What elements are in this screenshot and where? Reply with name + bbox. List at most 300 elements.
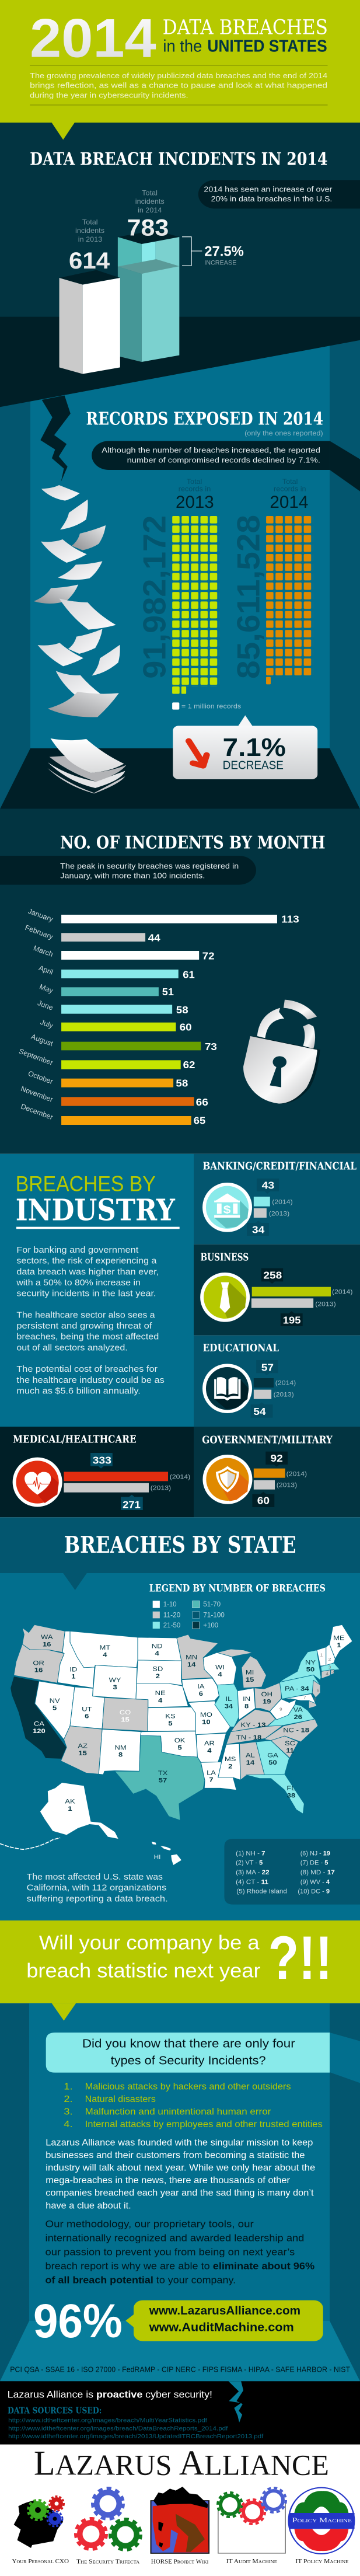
mission paragraph: businesses and their customers from becoming a statistic the	[46, 2150, 305, 2160]
small states box: (7) DE - 5	[300, 1860, 328, 1866]
bar chart: months: 62	[183, 1059, 195, 1071]
industry text	[16, 1245, 165, 1396]
logo captions: IT Policy Machine	[295, 2558, 348, 2565]
incident types list: Internal attacks by employees and other trusted entities	[85, 2119, 323, 2129]
lazarus alliance wordmark: LAZARUS ALLIANCE	[34, 2444, 329, 2483]
label 2013: 2013	[176, 492, 214, 511]
subtitle: (only the ones reported)	[244, 429, 323, 437]
state labels: SD	[152, 1665, 163, 1672]
callout pill: The peak in security breaches was registered in	[60, 862, 239, 870]
bar chart: months: 58	[176, 1078, 188, 1089]
industry text: with a 50% to 80% increase in	[16, 1278, 141, 1288]
incident types list: Natural disasters	[85, 2094, 156, 2104]
methodology paragraph: our passion to prevent you from being on next year’s	[46, 2246, 295, 2257]
label: total 2013: incidents	[75, 226, 104, 235]
question banner: breach statistic next year	[26, 1960, 261, 1982]
state labels: ID	[69, 1665, 78, 1673]
map legend: 51-70	[203, 1600, 221, 1608]
panel: educational: (2013)	[274, 1391, 294, 1398]
state labels: 4	[218, 1671, 222, 1678]
label: total 2014	[135, 189, 165, 214]
industry text: The potential cost of breaches for	[16, 1364, 158, 1374]
small states box: (1) NH - 7	[236, 1850, 265, 1857]
value 783: 783	[127, 215, 169, 240]
panel: government: (2014)	[286, 1470, 307, 1477]
state labels: 4	[207, 1747, 212, 1754]
vertical number 2014: 85,611,528	[230, 515, 267, 679]
vertical number 2013: 91,982,172	[136, 515, 172, 679]
logo gears: personal cxo	[28, 2496, 64, 2526]
state labels: WI	[215, 1664, 225, 1671]
california note: California, with 112 organizations	[27, 1883, 166, 1892]
increase stat: INCREASE	[204, 259, 236, 266]
methodology paragraph: internationally recognized and awarded leadership and	[46, 2232, 304, 2243]
value 614: 614	[69, 248, 110, 274]
hawaii	[152, 1842, 181, 1865]
panel: educational: EDUCATIONAL	[202, 1342, 279, 1354]
state labels: TX	[158, 1769, 167, 1777]
label 2013	[176, 477, 214, 511]
logo: policy machine: Policy Machine	[292, 2516, 352, 2524]
state labels: 6	[85, 1713, 89, 1720]
state labels: AR	[204, 1740, 215, 1747]
state labels: SC	[285, 1740, 295, 1747]
label: total 2014: in 2014	[138, 206, 162, 214]
did you know box: types of Security Incidents?	[111, 2054, 266, 2067]
closing copy	[33, 2082, 323, 2347]
state labels: 6	[199, 1690, 203, 1697]
month labels: November	[20, 1085, 54, 1104]
state labels: 19	[263, 1698, 271, 1705]
map section	[11, 1583, 352, 1839]
panel: medical: (2014)	[170, 1473, 190, 1480]
state labels: 26	[294, 1713, 302, 1721]
label: total 2013: in 2013	[78, 235, 102, 243]
state labels: 15	[78, 1749, 87, 1757]
state labels: OK	[174, 1737, 185, 1744]
small states box: (4) CT - 11	[236, 1878, 269, 1885]
month labels: December	[20, 1102, 54, 1121]
footer	[8, 2365, 355, 2565]
state labels: 3	[113, 1683, 117, 1691]
state labels: MN	[186, 1654, 197, 1661]
incident types list: Malicious attacks by hackers and other outsiders	[85, 2082, 291, 2092]
state labels: PA - 34	[285, 1685, 309, 1692]
state labels: 2	[228, 1763, 233, 1770]
falling papers	[34, 485, 120, 717]
state labels: 34	[225, 1702, 233, 1710]
state labels: 9	[279, 1707, 282, 1711]
state labels: 50	[306, 1666, 315, 1673]
label 2013: records in	[179, 485, 211, 493]
header block	[30, 8, 328, 140]
bar chart: months: 113	[281, 914, 299, 925]
state labels: 11	[286, 1747, 294, 1754]
state labels: TN - 18	[236, 1734, 262, 1741]
month labels: September	[18, 1047, 54, 1067]
hawaii: HI	[154, 1854, 160, 1861]
data sources links: http://www.idtheftcenter.org/images/breach/DataBreachReports_2014.pdf	[8, 2425, 228, 2432]
websites bubble: www.AuditMachine.com	[149, 2320, 294, 2334]
state labels: NY	[305, 1658, 316, 1666]
panel: educational: 54	[253, 1406, 266, 1418]
title: united states: UNITED STATES	[207, 37, 327, 55]
bar 2013	[60, 248, 120, 374]
incidents by month section	[0, 832, 326, 1127]
state labels: 4	[155, 1650, 159, 1657]
title: 2014: 2014	[30, 8, 156, 69]
state labels: 14	[187, 1661, 196, 1668]
month labels: July	[39, 1018, 54, 1030]
state labels: 16	[43, 1640, 51, 1648]
state labels: 1	[71, 1673, 76, 1680]
methodology paragraph: breach report is why we are able to eliminate about 96%	[46, 2260, 314, 2271]
icon: shield	[216, 1466, 249, 1501]
label 2014: Total	[282, 477, 298, 486]
panel: medical: MEDICAL/HEALTHCARE	[13, 1433, 137, 1445]
callout pill	[198, 180, 360, 208]
state labels: ND	[152, 1642, 163, 1650]
month labels	[18, 907, 54, 1121]
title: in the: in the	[163, 37, 202, 55]
state labels: KY - 13	[241, 1721, 266, 1728]
small states box: (8) MD - 17	[300, 1869, 335, 1876]
logo: horse project	[151, 2487, 209, 2553]
incident types list: 3.	[64, 2107, 72, 2117]
label 2014	[270, 477, 308, 511]
logo gears: audit machine	[218, 2488, 286, 2524]
state labels: 2	[328, 1657, 331, 1662]
map legend: 11-20	[163, 1611, 180, 1619]
state labels: GA	[267, 1752, 278, 1759]
state labels: 4	[326, 1672, 329, 1676]
websites bubble	[125, 2300, 323, 2341]
label: total 2014: incidents	[135, 197, 165, 205]
state labels: WY	[109, 1676, 121, 1683]
label: total 2013	[75, 218, 104, 243]
intro text: brings reflection, as well as a chance to pause and look at what happened	[30, 82, 327, 90]
panel: medical: 271	[123, 1500, 141, 1511]
mission paragraph: Lazarus Alliance was founded with the singular mission to keep	[46, 2138, 313, 2148]
state labels: MS	[225, 1755, 236, 1763]
state labels: 4	[158, 1696, 163, 1704]
did you know box: Did you know that there are only four	[82, 2037, 295, 2050]
state labels: 14	[246, 1759, 254, 1766]
state labels: IL	[226, 1695, 232, 1703]
panel: banking: (2013)	[269, 1210, 289, 1217]
small states box: (5) Rhode Island	[236, 1888, 287, 1895]
data sources heading: DATA SOURCES USED:	[8, 2406, 102, 2415]
panel: banking: (2014)	[272, 1198, 293, 1205]
mission paragraph: mega-breaches in the news, there are thousands of other	[46, 2175, 290, 2185]
state labels: 57	[159, 1776, 167, 1784]
records exposed section	[40, 395, 360, 511]
label 2013: Total	[187, 477, 202, 486]
callout pill: 20% in data breaches in the U.S.	[211, 194, 332, 203]
state labels: LA	[207, 1769, 216, 1776]
industry text: security incidents in the last year.	[16, 1289, 156, 1298]
panel: medical: (2013)	[151, 1484, 171, 1491]
state labels: NC - 18	[283, 1727, 309, 1734]
panel: medical	[13, 1433, 190, 1511]
header arrow	[52, 123, 75, 140]
map legend: 71-100	[203, 1611, 225, 1619]
small states box: (10) DC - 9	[298, 1888, 330, 1895]
state labels: 1	[337, 1641, 341, 1649]
logo captions	[12, 2558, 348, 2565]
state labels: 6	[317, 1688, 319, 1693]
state labels: MT	[99, 1644, 111, 1651]
state labels: VA	[293, 1706, 303, 1713]
bar chart: months: 60	[180, 1022, 192, 1033]
state labels: 3	[328, 1665, 331, 1669]
state labels: 5	[53, 1704, 57, 1711]
small states box: (9) WV - 4	[300, 1878, 330, 1885]
state labels: UT	[82, 1705, 92, 1713]
label 2014: records in	[274, 485, 306, 493]
methodology paragraph	[46, 2218, 314, 2285]
state labels: 15	[121, 1716, 130, 1723]
icon: bank: $	[223, 1204, 231, 1216]
icon: book	[214, 1377, 249, 1409]
panel: educational: (2014)	[275, 1379, 296, 1386]
panel: banking	[202, 1160, 356, 1236]
state labels: IN	[243, 1695, 250, 1703]
incident types list: 1.	[64, 2082, 72, 2092]
logo captions: HORSE Project Wiki	[151, 2558, 209, 2565]
bar chart: months: 72	[202, 951, 215, 962]
panel: business: (2013)	[315, 1300, 336, 1308]
icon: down arrow	[188, 741, 207, 766]
state labels: 8	[118, 1751, 123, 1758]
state labels: OR	[33, 1659, 44, 1667]
increase stat	[204, 243, 244, 266]
state labels: 1	[68, 1805, 72, 1812]
map legend: 21-50	[163, 1621, 180, 1629]
state labels: AZ	[78, 1742, 88, 1749]
state labels: AK	[65, 1798, 75, 1805]
state labels: 50	[268, 1759, 277, 1766]
callout pill	[0, 856, 256, 885]
increase stat: 27.5%	[204, 243, 244, 259]
intro text: during the year in cybersecurity incidents.	[30, 92, 188, 100]
industry text: out of all sectors analyzed.	[16, 1343, 128, 1353]
panel: educational: 57	[261, 1362, 274, 1374]
state labels: FL	[286, 1784, 296, 1792]
panel: business	[200, 1251, 352, 1326]
incidents section	[30, 148, 360, 374]
us map	[11, 1625, 352, 1820]
logo: personal cxo head	[14, 2500, 63, 2548]
state labels: 5	[178, 1744, 182, 1751]
month labels: February	[24, 923, 54, 941]
mission paragraph	[46, 2138, 315, 2211]
decrease callout: DECREASE	[223, 758, 284, 772]
state labels: OH	[261, 1690, 272, 1698]
bar chart: months: 66	[196, 1097, 208, 1109]
label: total 2013: Total	[82, 218, 98, 226]
small states box: (3) MA - 22	[236, 1869, 270, 1876]
month labels: April	[37, 964, 54, 977]
state labels: 4	[103, 1651, 107, 1658]
websites bubble: www.LazarusAlliance.com	[149, 2304, 300, 2317]
state labels: 38	[287, 1791, 296, 1799]
state labels: 7	[303, 1695, 306, 1700]
logo captions: The Security Trifecta	[76, 2558, 139, 2565]
bar chart: months: 58	[176, 1005, 188, 1016]
state labels	[33, 1633, 345, 1812]
state labels: KS	[165, 1713, 176, 1720]
state labels: 5	[331, 1669, 334, 1674]
panel: business: 258	[263, 1270, 282, 1281]
mission paragraph: industry will talk about next year. While we only hear about the	[46, 2163, 315, 2173]
did you know box	[46, 2033, 330, 2073]
state labels: WA	[41, 1633, 53, 1641]
records grids and callout	[34, 485, 317, 793]
breaches by industry lower	[13, 1342, 333, 1590]
small states box: (6) NJ - 19	[300, 1850, 330, 1857]
methodology paragraph: Our methodology, our proprietary tools, our	[46, 2218, 254, 2229]
intro text: The growing prevalence of widely publicized data breaches and the end of 2014	[30, 72, 327, 81]
alaska	[40, 1783, 118, 1839]
state section arrow	[63, 1573, 87, 1590]
map legend: +100	[203, 1621, 218, 1629]
data sources links: http://www.idtheftcenter.org/images/breach/MultiYearStatistics.pdf	[8, 2417, 208, 2424]
industry text: persistent and growing threat of	[16, 1321, 152, 1331]
small states box: (2) VT - 5	[236, 1860, 263, 1866]
small states box	[224, 1839, 360, 1905]
logo gears: security trifecta	[76, 2488, 141, 2550]
month labels: May	[39, 982, 54, 995]
map footer	[0, 1838, 360, 2083]
panel: business: BUSINESS	[201, 1251, 249, 1263]
month labels: October	[27, 1069, 54, 1086]
state labels: CO	[120, 1709, 131, 1716]
state labels: MI	[246, 1669, 254, 1676]
question banner: ?!!	[268, 1924, 332, 1992]
decrease callout	[173, 715, 317, 779]
map legend: 1-10	[163, 1600, 177, 1608]
icon: broken padlock	[243, 1000, 320, 1104]
month labels: August	[30, 1033, 54, 1048]
california note: The most affected U.S. state was	[27, 1872, 163, 1882]
bar chart: months: 44	[148, 933, 160, 944]
month labels: March	[32, 944, 54, 958]
proactive line: Lazarus Alliance is proactive cyber security!	[8, 2389, 212, 2400]
panel: government	[202, 1434, 333, 1507]
industry text: the healthcare industry could be as	[16, 1375, 165, 1385]
heading: breaches by: BREACHES BY	[16, 1172, 156, 1196]
stat: 96%: 96%	[33, 2294, 123, 2347]
state labels: NV	[50, 1697, 60, 1704]
state labels: 1	[320, 1653, 323, 1657]
state labels: 2	[156, 1672, 160, 1680]
incident types list: 4.	[64, 2119, 72, 2129]
callout pill: Although the number of breaches increased, the reported	[102, 446, 320, 454]
map legend	[153, 1600, 225, 1629]
state labels: MO	[200, 1711, 212, 1719]
industry text: sectors, the risk of experiencing a	[16, 1256, 157, 1266]
logo: policy machine	[289, 2488, 355, 2554]
logo: audit machine frame	[218, 2502, 285, 2553]
mission paragraph: have a clue about it.	[46, 2201, 131, 2211]
question banner	[26, 1924, 332, 1992]
state labels: AL	[246, 1752, 255, 1759]
industry text: breaches, being the most affected	[16, 1332, 159, 1341]
heading: industry: INDUSTRY	[16, 1193, 176, 1228]
state labels: NE	[155, 1689, 166, 1697]
intro text	[30, 72, 327, 100]
panel: business: 195	[283, 1315, 301, 1326]
perspective shadow	[330, 441, 360, 492]
callout pill: 2014 has seen an increase of over	[204, 184, 333, 193]
callout pill	[92, 441, 330, 470]
label 2014: 2014	[270, 492, 308, 511]
bar chart: months: 51	[162, 987, 174, 998]
bracket	[182, 237, 202, 266]
month labels: June	[36, 999, 54, 1012]
state labels: 10	[202, 1719, 211, 1726]
data sources links	[8, 2417, 264, 2440]
data sources links: http://www.idtheftcenter.org/images/breach/2013/UpdatedITRCBreachReport2013.pdf	[8, 2434, 264, 2440]
callout pill: January, with more than 100 incidents.	[60, 872, 205, 880]
methodology paragraph: of all breach potential to your company.	[46, 2274, 236, 2285]
panel: business: (2014)	[332, 1288, 352, 1295]
state labels: ME	[333, 1634, 345, 1641]
logo captions: IT Audit Machine	[226, 2558, 277, 2565]
grid 2013	[172, 516, 219, 694]
incident types list: Malfunction and unintentional human error	[85, 2107, 271, 2117]
alaska islands	[0, 1838, 60, 1849]
perspective strip	[330, 2033, 360, 2083]
bar chart: months: 73	[205, 1041, 217, 1053]
industry text: The healthcare sector also sees a	[16, 1310, 155, 1320]
industry text: much as $5.6 billion annually.	[16, 1386, 141, 1396]
california note: suffering reporting a data breach.	[27, 1894, 168, 1904]
state labels: CA	[34, 1720, 44, 1727]
mission paragraph: companies breached each year and the sad thing is many don’t	[46, 2188, 314, 2198]
breaches by industry upper	[16, 1160, 356, 1396]
industry text: data breach was higher than ever,	[16, 1267, 159, 1277]
state labels: 5	[168, 1720, 173, 1727]
state labels: 8	[314, 1697, 316, 1702]
state labels: 120	[33, 1727, 46, 1735]
icon: tie	[220, 1282, 246, 1318]
state labels: 8	[244, 1702, 249, 1710]
month labels: January	[27, 907, 54, 923]
icon: bank	[214, 1193, 249, 1228]
logo captions: Your Personal CXO	[12, 2558, 69, 2565]
panel: banking: 34	[252, 1225, 265, 1236]
paper stack	[47, 738, 126, 793]
panel: banking: 43	[262, 1180, 274, 1191]
banner arrow	[52, 2003, 76, 2021]
panel: government: 60	[257, 1496, 270, 1507]
panel: government: (2013)	[277, 1481, 297, 1489]
incident types list: 2.	[64, 2094, 72, 2104]
bar chart: months	[61, 914, 299, 1127]
state labels: 16	[34, 1667, 43, 1674]
state labels: NM	[115, 1744, 127, 1751]
grid legend: = 1 million records	[181, 702, 241, 710]
state labels: IA	[197, 1683, 204, 1690]
label: total 2014: Total	[142, 189, 158, 197]
bar 2014	[118, 215, 179, 362]
panel: government: 92	[271, 1453, 283, 1465]
callout pill: number of compromised records declined by 7.1%.	[127, 455, 320, 464]
california note	[27, 1872, 168, 1904]
grid 2014	[266, 516, 313, 684]
